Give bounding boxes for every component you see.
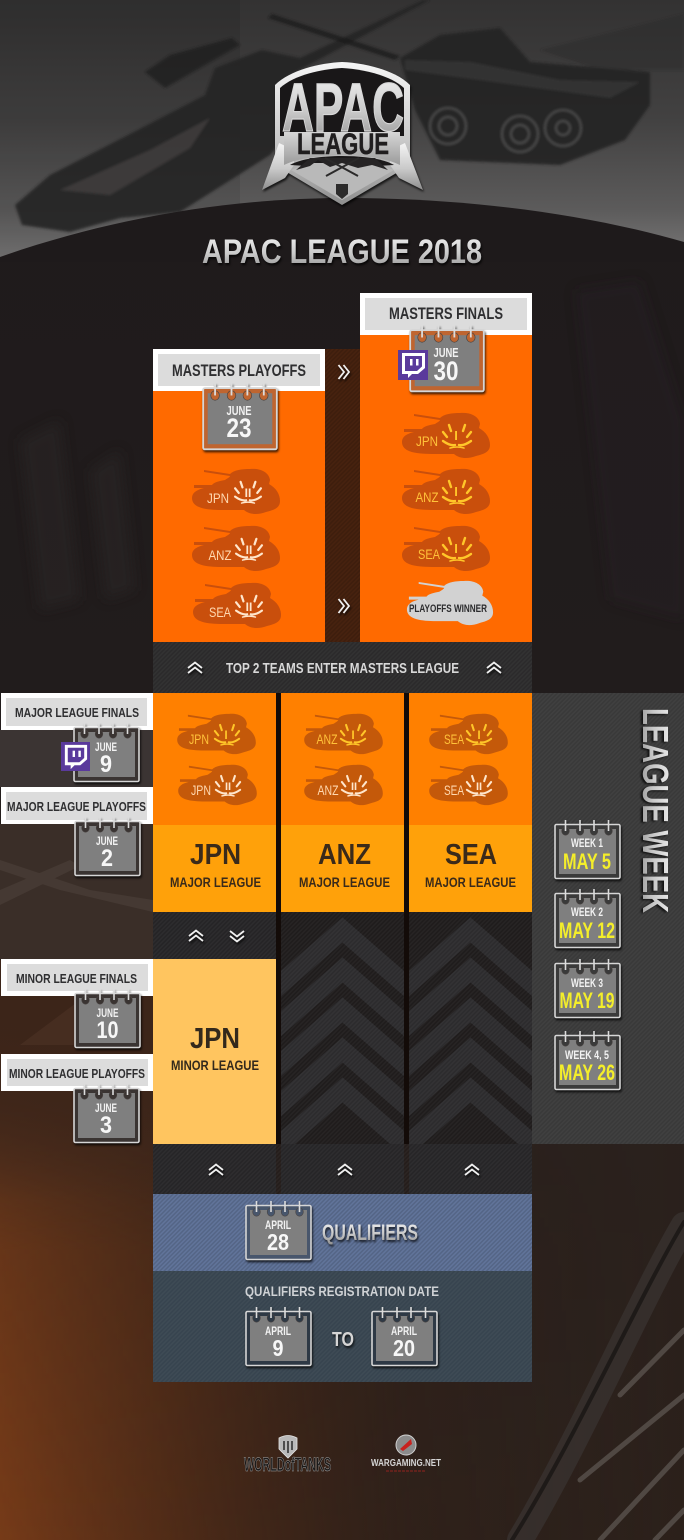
panel: JPN minor league bbox=[153, 959, 276, 1144]
calendar: June 9 bbox=[74, 723, 139, 782]
calendar: week 4 and 5: MAY 26 bbox=[559, 1060, 615, 1085]
arrow: SEA up bbox=[465, 1164, 479, 1175]
connector strip between masters panels bbox=[325, 349, 360, 642]
panel: league week bbox=[532, 693, 684, 1144]
logo: Wargaming.net bbox=[371, 1435, 441, 1471]
team: JPN second place: JPN bbox=[207, 490, 229, 506]
panel: qualifiers registration date: QUALIFIERS REGISTRATION DATE bbox=[245, 1284, 439, 1299]
arrow: ANZ up bbox=[338, 1164, 352, 1175]
calendar: April 28: APRIL bbox=[265, 1218, 291, 1232]
team: JPN second: II bbox=[225, 781, 231, 793]
team: JPN first: I bbox=[224, 728, 228, 742]
heading: ANZ major league: MAJOR LEAGUE bbox=[299, 874, 390, 890]
ANZ chevron column bbox=[281, 912, 404, 1144]
team: JPN first place: JPN bbox=[416, 433, 438, 449]
logo wordmark LEAGUE: LEAGUE bbox=[297, 128, 389, 161]
arrow: playoffs to finals bottom bbox=[338, 599, 349, 613]
arrow: down bbox=[230, 931, 244, 942]
logo: World of Tanks bbox=[244, 1436, 331, 1476]
calendar: June 9: JUNE bbox=[95, 742, 117, 754]
team: SEA second place: SEA bbox=[209, 604, 232, 620]
page background bbox=[0, 434, 684, 1540]
label: major league playoffs: MAJOR LEAGUE PLAYOFFS bbox=[7, 799, 146, 814]
calendar: April 20: 20 bbox=[393, 1335, 415, 1361]
team: ANZ first place: ANZ bbox=[416, 489, 439, 505]
arrow: JPN up bbox=[209, 1164, 223, 1175]
text: to: TO bbox=[332, 1329, 354, 1351]
arrow: up bbox=[189, 930, 203, 941]
calendar: week 2: MAY 12 bbox=[559, 918, 615, 943]
label: minor league playoffs: MINOR LEAGUE PLAYOFFS bbox=[9, 1066, 145, 1081]
team: ANZ second place bbox=[192, 526, 280, 571]
heading: JPN major league: JPN bbox=[190, 839, 241, 871]
calendar: week 1: WEEK 1 bbox=[571, 838, 603, 850]
team: JPN first place: I bbox=[454, 428, 458, 443]
calendar: June 30: 30 bbox=[434, 356, 458, 386]
calendar: June 30 bbox=[410, 325, 484, 391]
team: SEA first: I bbox=[477, 728, 481, 742]
logo wordmark APAC: APAC bbox=[282, 69, 404, 146]
team: ANZ first: ANZ bbox=[316, 731, 338, 747]
bottom right tracks texture bbox=[512, 1222, 684, 1540]
banner: top 2 teams enter masters league: TOP 2 TEAMS ENTER MASTERS LEAGUE bbox=[226, 660, 459, 677]
team: SEA first: SEA bbox=[444, 731, 464, 747]
team: SEA first bbox=[429, 714, 508, 754]
team: SEA first place: SEA bbox=[418, 546, 441, 562]
team: ANZ second bbox=[304, 765, 383, 805]
calendar: week 1 bbox=[555, 820, 620, 878]
team: JPN second place bbox=[192, 469, 280, 514]
label: minor league finals bbox=[1, 959, 153, 996]
header photo with tanks bbox=[0, 0, 684, 262]
calendar: June 10 bbox=[75, 989, 140, 1048]
heading: JPN major league bbox=[170, 839, 261, 890]
team: playoffs winner: PLAYOFFS WINNER bbox=[409, 603, 487, 615]
icon: twitch bbox=[398, 350, 428, 380]
logo: APAC League shield bbox=[262, 62, 423, 205]
team: JPN second: JPN bbox=[191, 782, 211, 798]
team: JPN first place bbox=[402, 413, 490, 458]
team: JPN second bbox=[178, 765, 257, 805]
calendar: week 3: WEEK 3 bbox=[571, 978, 603, 990]
panel: JPN minor league: JPN bbox=[190, 1023, 240, 1055]
team: ANZ second place: ANZ bbox=[208, 547, 232, 563]
label: major league playoffs bbox=[1, 787, 153, 824]
team: SEA first place bbox=[402, 526, 490, 571]
calendar: June 9: 9 bbox=[100, 751, 112, 778]
calendar: June 3: JUNE bbox=[95, 1103, 117, 1115]
calendar: June 10: 10 bbox=[96, 1017, 118, 1044]
logo: World of Tanks: WORLDofTANKS bbox=[244, 1455, 331, 1476]
team: SEA second place: II bbox=[246, 600, 252, 614]
right tank body bbox=[400, 28, 650, 165]
panel: SEA column bbox=[409, 693, 532, 912]
team: ANZ second: ANZ bbox=[318, 782, 339, 798]
calendar: April 9: APRIL bbox=[265, 1324, 291, 1338]
calendar: April 20: APRIL bbox=[391, 1324, 417, 1338]
arrow: up right bbox=[487, 662, 501, 673]
panel: qualifiers bbox=[153, 1194, 532, 1271]
heading: SEA major league: SEA bbox=[445, 839, 497, 871]
calendar: June 23: JUNE bbox=[226, 404, 252, 418]
arrow: playoffs to finals top bbox=[338, 365, 349, 379]
heading: league week: LEAGUE WEEK bbox=[635, 708, 676, 913]
calendar: June 2: 2 bbox=[101, 845, 113, 872]
panel: masters playoffs bbox=[153, 349, 325, 642]
dark arc bbox=[0, 198, 684, 262]
team: JPN first: JPN bbox=[189, 731, 209, 747]
calendar: June 2 bbox=[75, 817, 140, 876]
team: SEA second: SEA bbox=[444, 782, 464, 798]
calendar: April 28: 28 bbox=[267, 1229, 289, 1255]
heading: qualifiers: QUALIFIERS bbox=[322, 1220, 418, 1245]
title: APAC LEAGUE 2018 bbox=[202, 233, 482, 271]
panel: masters finals: MASTERS FINALS bbox=[389, 305, 503, 323]
panel: JPN minor league: MINOR LEAGUE bbox=[171, 1057, 259, 1073]
team: ANZ first place bbox=[402, 469, 490, 514]
logo small emblem bbox=[336, 184, 348, 199]
calendar: June 3 bbox=[74, 1084, 139, 1142]
calendar: April 9 bbox=[246, 1307, 311, 1366]
JPN promotion arrows block bbox=[153, 912, 276, 959]
SEA chevron column bbox=[409, 912, 532, 1144]
calendar: June 30: JUNE bbox=[434, 346, 458, 360]
calendar: June 23: 23 bbox=[226, 413, 252, 443]
team: SEA first place: I bbox=[454, 541, 458, 556]
panel: qualifiers registration date bbox=[153, 1271, 532, 1382]
team: SEA second bbox=[429, 765, 508, 805]
calendar: April 28 bbox=[246, 1201, 311, 1260]
logo: Wargaming.net: WARGAMING.NET bbox=[371, 1457, 441, 1469]
calendar: week 2: WEEK 2 bbox=[571, 907, 603, 919]
logo ribbon bbox=[262, 143, 423, 190]
panel: JPN column bbox=[153, 693, 276, 912]
calendar: week 3 bbox=[555, 959, 620, 1018]
heading: ANZ major league bbox=[299, 839, 390, 890]
banner: top 2 teams enter masters league bbox=[153, 642, 532, 693]
calendar: June 23 bbox=[203, 383, 277, 449]
panel: masters finals bbox=[360, 293, 532, 642]
calendar: week 3: MAY 19 bbox=[560, 988, 614, 1013]
label: minor league finals: MINOR LEAGUE FINALS bbox=[16, 971, 137, 986]
label: major league finals: MAJOR LEAGUE FINALS bbox=[15, 705, 139, 720]
heading: SEA major league: MAJOR LEAGUE bbox=[425, 874, 516, 890]
icon: twitch small bbox=[61, 742, 90, 771]
label: minor league playoffs bbox=[1, 1054, 153, 1091]
calendar: April 20 bbox=[372, 1307, 437, 1366]
left tank body bbox=[15, 0, 430, 232]
team: ANZ first: I bbox=[351, 728, 355, 742]
column gutters bbox=[153, 693, 532, 1144]
panel: ANZ column bbox=[281, 693, 404, 912]
calendar: April 9: 9 bbox=[272, 1335, 284, 1361]
calendar: June 10: JUNE bbox=[96, 1008, 119, 1020]
calendar: June 2: JUNE bbox=[96, 836, 118, 848]
team: ANZ first bbox=[304, 714, 383, 754]
panel: masters playoffs: MASTERS PLAYOFFS bbox=[172, 362, 306, 380]
team: ANZ second: II bbox=[351, 781, 357, 793]
calendar: week 4 and 5: WEEK 4, 5 bbox=[565, 1050, 609, 1062]
team: SEA second place bbox=[193, 583, 281, 628]
team: SEA second: II bbox=[476, 781, 482, 793]
left side strips bbox=[0, 730, 153, 1200]
calendar: week 2 bbox=[555, 889, 620, 948]
team: JPN first bbox=[177, 714, 256, 754]
team: JPN second place: II bbox=[245, 486, 251, 500]
promotion arrows row bbox=[153, 1144, 532, 1194]
calendar: week 4 and 5 bbox=[555, 1031, 620, 1090]
label: major league finals bbox=[1, 693, 153, 730]
heading: ANZ major league: ANZ bbox=[318, 839, 371, 871]
calendar: June 3: 3 bbox=[100, 1112, 112, 1139]
heading: SEA major league bbox=[425, 839, 516, 890]
team: playoffs winner bbox=[407, 581, 493, 625]
team: ANZ second place: II bbox=[246, 543, 252, 557]
heading: JPN major league: MAJOR LEAGUE bbox=[170, 874, 261, 890]
calendar: week 1: MAY 5 bbox=[563, 849, 611, 874]
arrow: up left bbox=[188, 662, 202, 673]
team: ANZ first place: I bbox=[454, 484, 458, 499]
